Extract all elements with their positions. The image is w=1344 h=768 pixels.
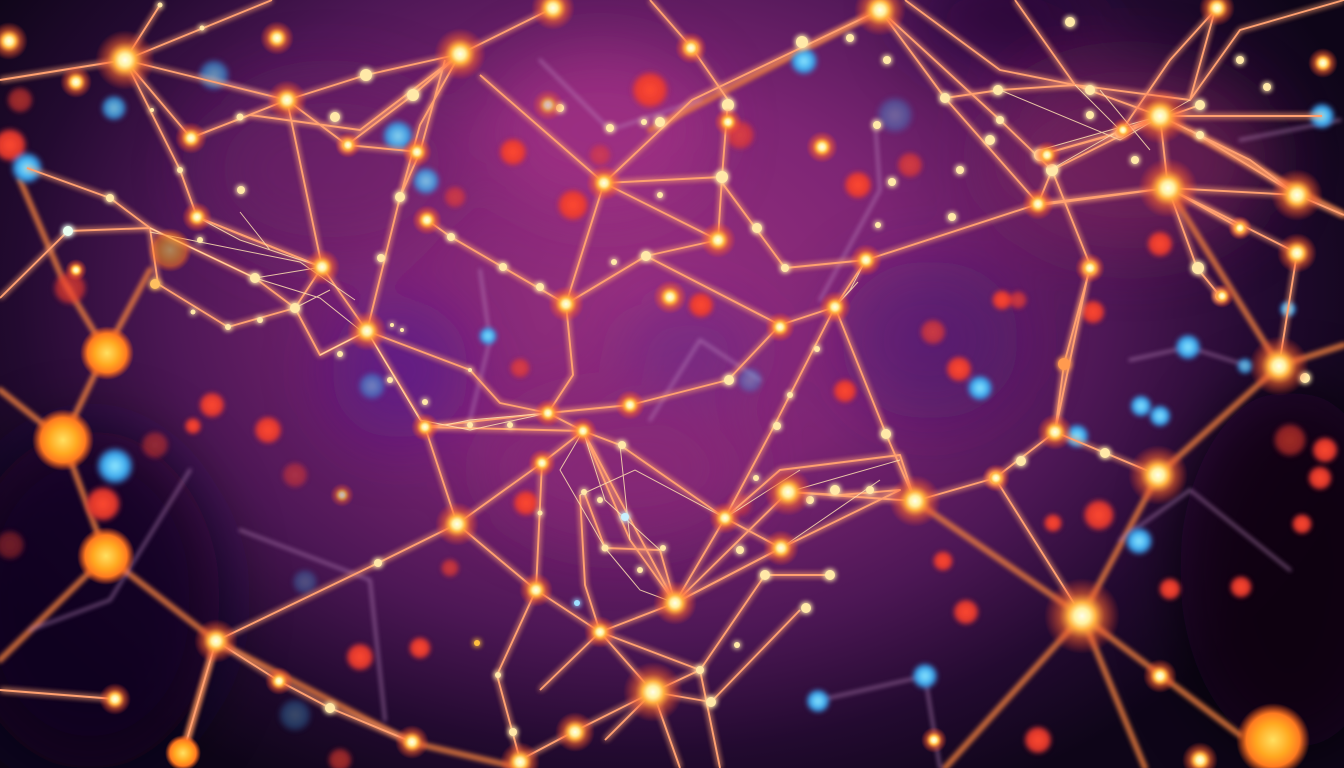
fine web filaments (150, 85, 1190, 603)
large orange orbs (32, 228, 1310, 768)
